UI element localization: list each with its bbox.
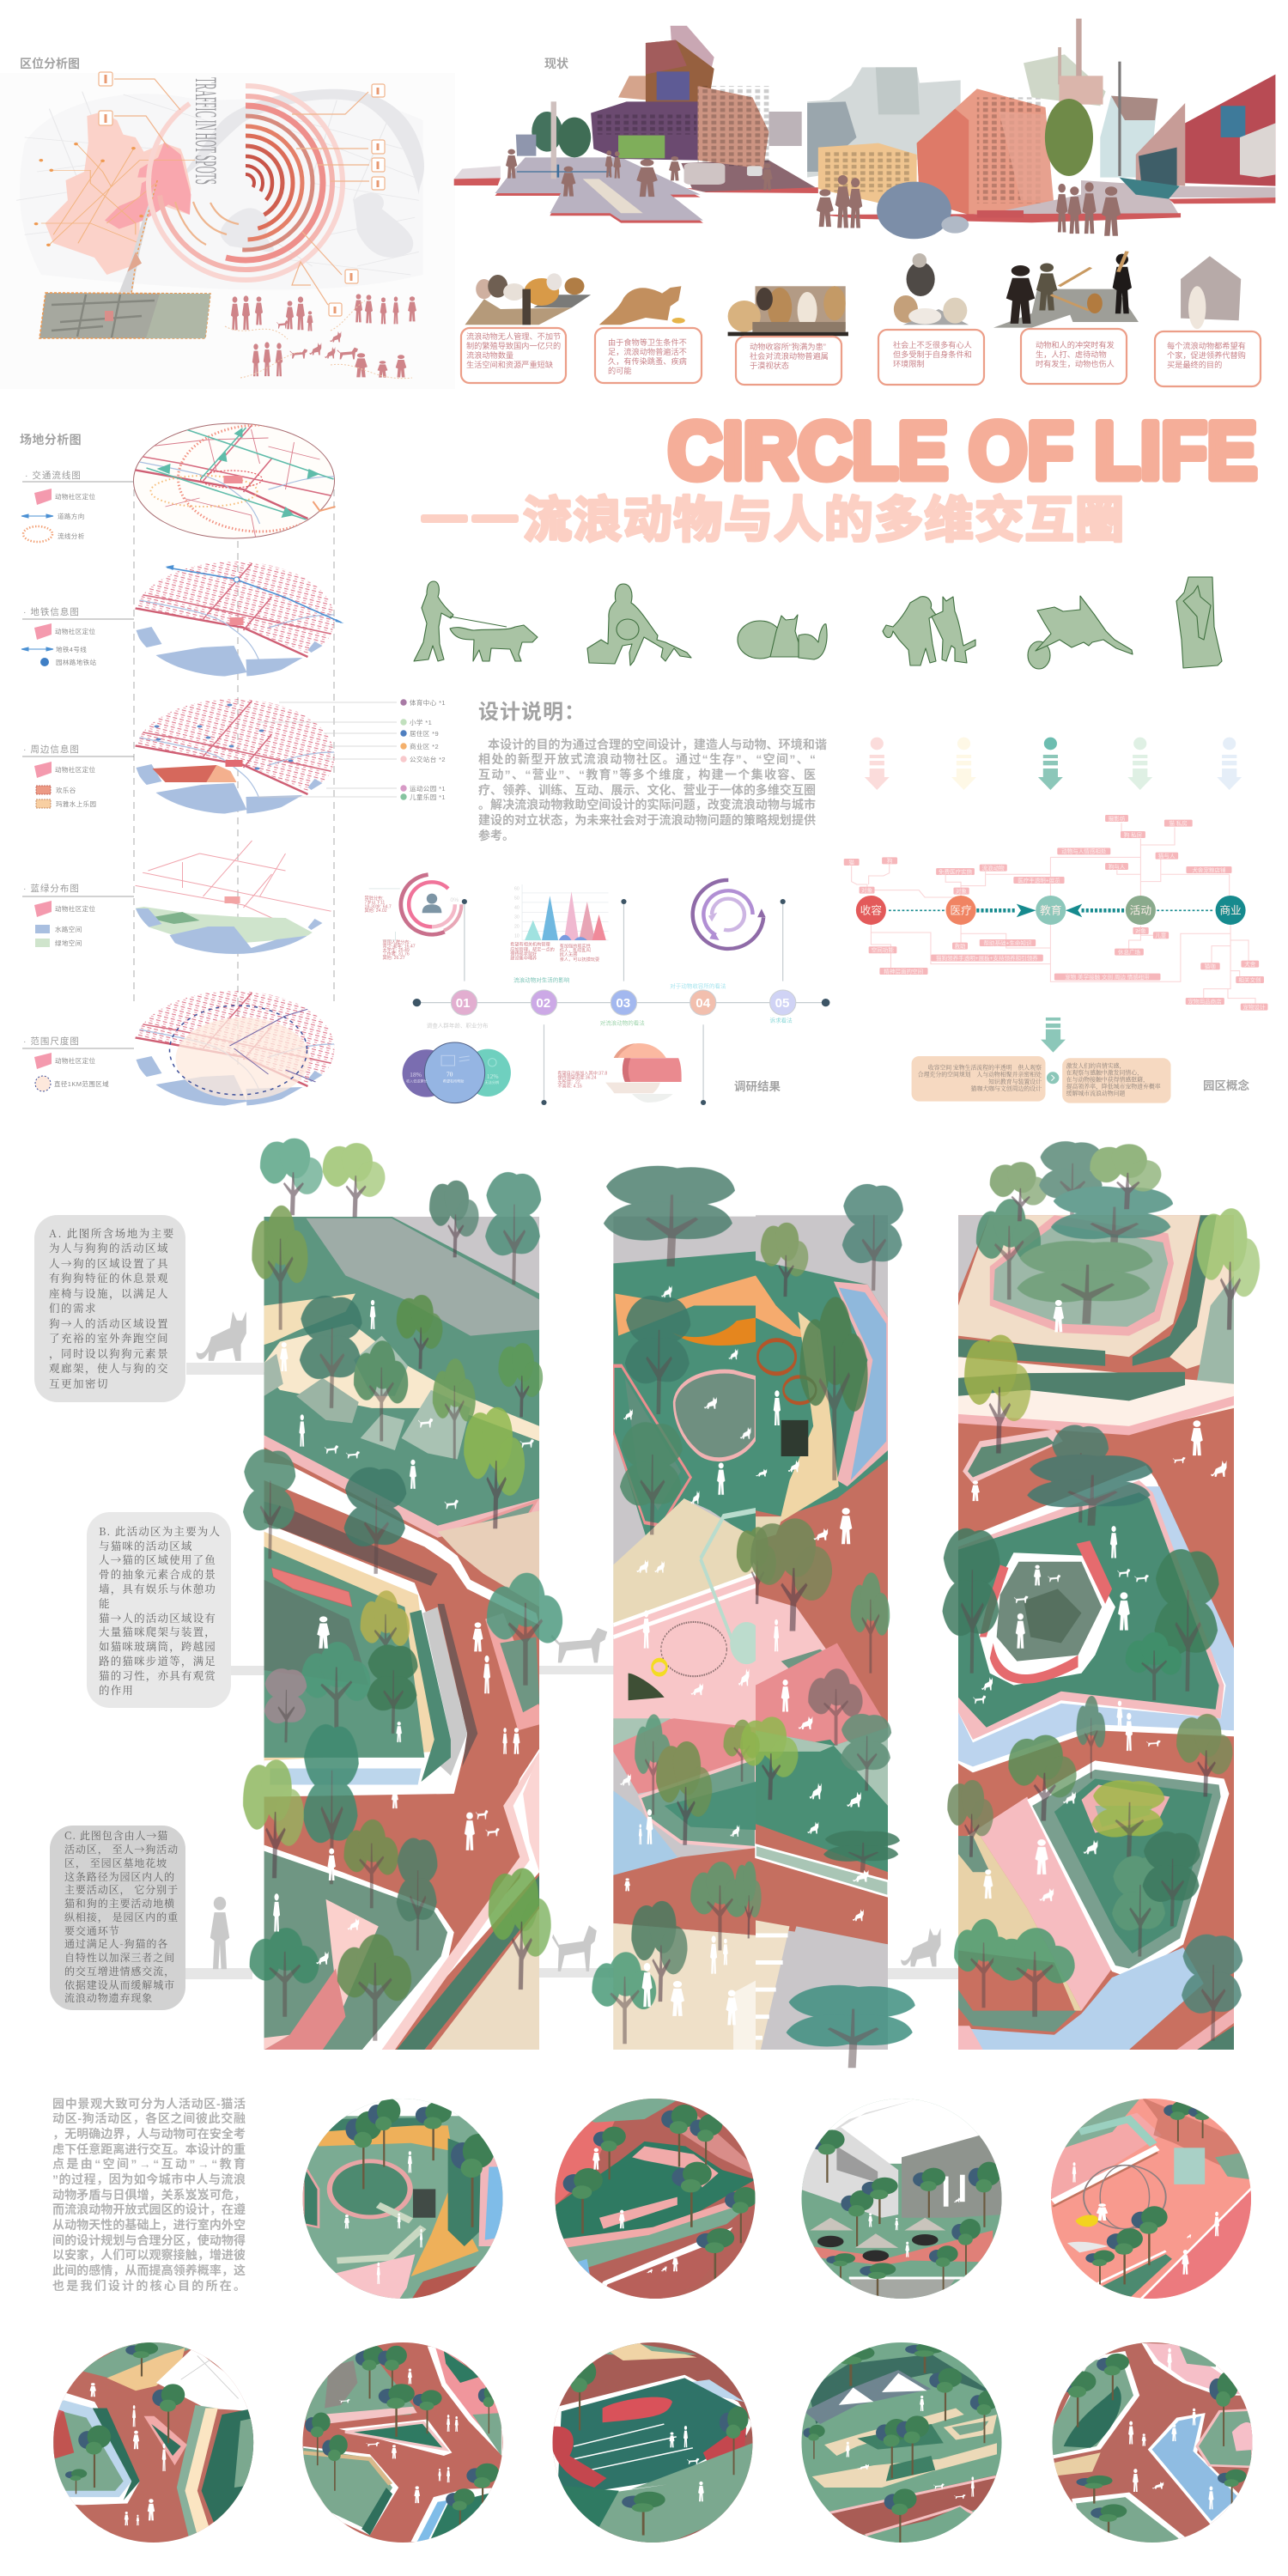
area chart: 60 [514, 886, 519, 891]
legend: metro: · 地铁信息图 [23, 606, 80, 617]
heading: location analysis: 区位分析图 [20, 57, 80, 70]
callout B: 骨的抽象元素合成的景 [99, 1566, 216, 1582]
location map [16, 89, 424, 293]
survey data: age: 其他: 26.27 [383, 955, 405, 961]
captions: 对流浪动物的看法 [600, 1018, 645, 1026]
survey data: impact: 伤人，乱咬乱叫 [560, 948, 591, 954]
description text: 参考。 [478, 829, 514, 842]
concept flow chart: 教育 [1040, 904, 1061, 917]
area chart [514, 884, 609, 940]
note text 5: 时有发生，动物也伤人 [1036, 359, 1115, 368]
ring chart: age and occupation: 0% [450, 897, 459, 903]
survey data: age [365, 896, 416, 961]
callout C: 通过满足人-狗猫的各 [64, 1936, 168, 1951]
callout C: C. 此图包含由人→猫 [64, 1828, 168, 1843]
photo: people and dog conflict [993, 252, 1139, 328]
note text 5: 动物和人的冲突时有发 [1036, 340, 1115, 349]
half-circle chart: 无所谓：22 [557, 1078, 580, 1084]
description text [478, 738, 827, 842]
detail circle 1 [288, 2087, 518, 2310]
photo: shelter dogs [728, 286, 848, 336]
people and pets silhouettes [225, 294, 416, 379]
note text 2: 足，流浪动物普遍活不 [608, 347, 687, 356]
note boxes [461, 328, 1261, 386]
detail circle 8 [799, 2335, 1005, 2548]
trees panel 1 [243, 1139, 562, 2041]
callout C: 区， 至园区墓地花坡 [64, 1856, 167, 1870]
survey data: age: 常驻分布: [365, 896, 384, 902]
note text 3 [750, 342, 829, 370]
text: garden description: 而流浪动物开放式园区的设计，在遵 [52, 2202, 246, 2216]
concept box right [1062, 1058, 1171, 1103]
callout B: 墙，具有娱乐与休憩功 [99, 1581, 216, 1596]
callout A: A. 此图所含场地为主要 [49, 1225, 175, 1241]
timeline: 04 [696, 997, 711, 1011]
callout C: 猫和狗的主要活动地横 [64, 1896, 175, 1911]
panel: location analysis: TRAFFIC IN HOT SPOTS [189, 77, 223, 185]
legend: traffic flow: 动物社区定位 [55, 492, 95, 501]
concept box left: 猫咖犬咖与文创周边的设计 [971, 1084, 1042, 1092]
detail circle 3 [802, 2099, 1001, 2299]
animal photo row [465, 252, 1241, 336]
points of interest legend [258, 698, 446, 801]
concept flow chart: 商业 [1219, 905, 1242, 917]
callout B: 与猫咪的活动区域 [99, 1538, 193, 1553]
note text 3: 动物收容所“狗满为患” [750, 342, 826, 351]
callout C: 要交通环节 [64, 1923, 120, 1938]
heading: design description: 设计说明： [478, 701, 586, 724]
points of interest legend: 公交站台 *2 [410, 755, 446, 763]
captions: 诉求看法 [770, 1017, 793, 1024]
concept flow chart: 狗 [887, 857, 892, 865]
legend: traffic flow: 流线分析 [58, 532, 85, 540]
concept flow chart: 相关文创 [1238, 975, 1261, 983]
concept flow chart: 宠物用品商店 [1188, 997, 1222, 1005]
callout A: 为人与狗狗的活动区域 [49, 1240, 169, 1255]
transport icons [99, 72, 385, 316]
cycle icon [690, 878, 767, 951]
callout C: 主要活动区， 它分别于 [64, 1882, 179, 1897]
text: garden description: 此间的感情，从而提高领养概率，这 [52, 2263, 246, 2277]
text: garden description: 以安家，人们可以观察接触，增进彼 [52, 2248, 246, 2262]
concept box right: 在观察与感触中激发同情心， [1066, 1068, 1143, 1077]
text: garden description: 也是我们设计的核心目的所在。 [52, 2279, 246, 2293]
heading: status: 现状 [544, 57, 568, 70]
figures panel 1 [273, 1300, 534, 1965]
concept flow chart: 救助 [955, 942, 966, 950]
map: metro [134, 562, 343, 679]
callout B: 的作用 [99, 1682, 134, 1698]
panel: park concept [844, 738, 1267, 1103]
callout A: 狗→人的活动区域设置 [49, 1315, 169, 1331]
trees panel 2 [592, 1166, 776, 2044]
axonometric panel 1 [243, 1139, 562, 2050]
points of interest legend: 儿童乐园 *1 [410, 793, 446, 801]
concept flow chart: 猫 [848, 858, 855, 866]
note text 4: 但多受制于自身条件和 [893, 349, 972, 359]
area chart: 50 [514, 896, 519, 901]
legend: blue and green: 动物社区定位 [55, 904, 95, 913]
legend: scale range: · 范围尺度图 [23, 1036, 80, 1047]
note text 4: 社会上不乏很多有心人 [893, 340, 972, 349]
callout C: 的交互增进情感交流， [64, 1964, 175, 1978]
callout A: 座椅与设施，以满足人 [49, 1285, 169, 1301]
aerial inset [39, 293, 210, 338]
detail circle 9 [1053, 2342, 1252, 2543]
legend: blue and green: 绿地空间 [55, 939, 82, 947]
callout B: 路的猫咪步道等，满足 [99, 1653, 216, 1668]
note text 1 [466, 331, 561, 369]
captions [427, 975, 793, 1030]
callout C [50, 1826, 185, 2010]
legend: metro: 园林路地铁站 [56, 658, 96, 666]
half-circle chart: 不喜欢: 4.16 [557, 1084, 582, 1090]
text: garden description: ”的过程，因为如今城市中人与流浪 [52, 2172, 246, 2186]
concept flow chart: 摄影坊 [1109, 814, 1126, 822]
ring chart: traffic in hot spots [149, 86, 343, 280]
venn chart: 希望有所帮助 [443, 1078, 464, 1083]
concept flow chart: 犬舍宠粮店铺 [1192, 866, 1226, 873]
concept flow chart: 狗与人 [1109, 862, 1126, 870]
note text 1: 流浪动物数量 [466, 350, 513, 360]
detail circle 6 [302, 2342, 503, 2543]
survey data: impact: 应加管理，帮定一点的 [510, 946, 555, 952]
callout C: 纵相接， 是园区内的重 [64, 1910, 179, 1924]
legend: surroundings: 欢乐谷 [56, 786, 76, 794]
callout B: 如猫咪玻璃筒，跨越园 [99, 1638, 216, 1654]
concept box left: 知识教育与装置设计 [988, 1078, 1042, 1085]
callout A: 们的需求 [49, 1300, 97, 1315]
concept box left: 合理充分的空间规划 人与动物相聚并亲密相处 [918, 1071, 1042, 1078]
survey data: age: 工作者: 31.76 [383, 951, 410, 957]
callout B: 猫的习性，亦具有观赏 [99, 1668, 216, 1683]
street collage [454, 19, 1275, 239]
callout B: 大量猫咪爬架与装置， [99, 1624, 216, 1639]
venn chart: 无法分辨 [485, 1079, 499, 1084]
captions: 对于动物收容所的看法 [670, 981, 726, 989]
callout C: 活动区， 至人→狗活动 [64, 1842, 179, 1856]
map: surroundings [134, 699, 335, 817]
concept flow chart: 活动 [1130, 905, 1151, 917]
concept flow chart: 猫咖 [1205, 963, 1216, 970]
text: garden description: 点是由“空间”→“互动”→“教育 [52, 2157, 246, 2171]
silhouette: dog and cat playing [883, 597, 975, 665]
callout A: ，同时设以狗狗元素景 [49, 1346, 169, 1361]
callout A [34, 1215, 185, 1402]
note text 6: 买是最终的目的 [1167, 360, 1222, 369]
concept flow chart: 对象 [956, 887, 968, 895]
half-circle chart: 希望自己能加入其中:37.8 [557, 1070, 607, 1076]
venn chart: 收入低或繁忙 [406, 1078, 428, 1084]
gray frosted background [807, 67, 961, 178]
legend: scale range [22, 1036, 134, 1091]
map: scale range [134, 991, 335, 1109]
figures panel 3 [971, 1300, 1226, 1901]
legend: surroundings: 玛雅水上乐园 [56, 799, 96, 808]
legend: traffic flow: 道路方向 [58, 512, 85, 520]
silhouette: cat climbing tree [1176, 577, 1222, 668]
callout A: 互更加密切 [49, 1376, 109, 1391]
legend: metro: 动物社区定位 [55, 627, 95, 635]
detail circle 4 [1047, 2087, 1261, 2310]
survey data: age: 青少·老年: 16.47 [383, 943, 416, 949]
heading: park concept: 园区概念 [1203, 1078, 1249, 1092]
callout A: 有狗狗特征的休息景观 [49, 1270, 169, 1285]
survey data: age: 18-30岁: 64.7 [365, 903, 392, 909]
note text 3: 社会对流浪动物普遍属 [750, 351, 829, 361]
legend: blue and green: 水路空间 [55, 925, 82, 933]
concept flow chart: 宠物设计 [1243, 1003, 1266, 1011]
callout A: 观廊架，使人与狗的交 [49, 1360, 169, 1376]
photo: stray cat [599, 286, 685, 325]
note text 6 [1167, 341, 1246, 369]
concept box right: 在与动物接触中获得情感慰藉， [1066, 1075, 1149, 1084]
note text 4 [893, 340, 972, 368]
note text 2: 的可能 [608, 366, 632, 375]
legend: metro [21, 606, 134, 666]
callout A: 了充裕的室外奔跑空间 [49, 1330, 169, 1346]
note text 6: 个家，促进领养代替购 [1167, 350, 1246, 360]
note text 3: 于漠视状态 [750, 361, 789, 370]
survey data: age: 大学生: 25.49 [383, 947, 410, 953]
tags [844, 815, 1267, 1011]
detail circle 7 [549, 2332, 756, 2555]
callout B: B. 此活动区为主要为人 [99, 1523, 221, 1539]
note text 2: 久，有传染跳蚤、疾病 [608, 356, 687, 366]
note text 5: 生，人打、虐待动物 [1036, 349, 1107, 359]
area chart: 40 [514, 905, 519, 910]
concept flow chart: 精神层面的空间 [884, 967, 923, 975]
callout C: 这条路径为园区内人的 [64, 1869, 175, 1884]
timeline [413, 899, 829, 1105]
concept box right: 提高领养率，降低城市宠物遗弃概率 [1066, 1082, 1161, 1091]
text: garden description: 间的设计规划与合理分区，使动物得 [52, 2233, 246, 2247]
survey data: impact: 建设集中哺养 [510, 956, 537, 962]
detail circle 2 [554, 2087, 760, 2310]
panel: site analysis [20, 423, 446, 1109]
concept box left: 收容空间 宠物生活流程的半透明 供人观察 [928, 1064, 1042, 1072]
half-circle chart: 保持观望态度:36.24 [557, 1074, 597, 1080]
concept flow chart: 对象 [861, 886, 873, 894]
survey data: impact: 扰人无感 [560, 952, 577, 958]
note text 6: 每个流浪动物都希望有 [1167, 341, 1246, 350]
note text 2 [608, 337, 687, 375]
legend: surroundings: · 周边信息图 [23, 744, 80, 755]
note text 1: 制的繁殖导致国内一亿只的 [466, 341, 561, 350]
captions: 流浪动物对生活的影响 [513, 975, 569, 983]
heading: site analysis: 场地分析图 [20, 433, 82, 447]
concept flow chart: 猫 私房 [1169, 819, 1188, 827]
concept flow chart: 流浪动物 [982, 864, 1005, 872]
concept flow chart: 猫狗领养手透明+展板+支持领养和引领养 [936, 954, 1038, 962]
title: CIRCLE OF LIFE [668, 405, 1257, 495]
concept flow chart: 空间功能 [872, 946, 894, 954]
silhouette: person hugging dog [587, 584, 691, 665]
concept flow chart [844, 814, 1267, 1011]
text: garden description: 园中景观大致可分为人活动区-猫活 [52, 2097, 246, 2111]
survey data: impact [510, 942, 599, 963]
points of interest legend: 小学 *1 [410, 718, 432, 726]
timeline: 05 [775, 997, 789, 1011]
timeline: 01 [456, 997, 471, 1011]
callout C: 自特性以加深三者之间 [64, 1950, 175, 1965]
captions: 调查人群年龄、职业分布 [427, 1022, 489, 1030]
legend: blue and green [22, 883, 134, 947]
legend: scale range: 动物社区定位 [55, 1056, 95, 1065]
survey data: impact: 有加强的现实性 [560, 943, 591, 949]
callout B: 能 [99, 1595, 111, 1611]
concept flow chart: 帮助基础+生命知识 [983, 939, 1032, 946]
text: garden description: 从动物天性的基础上，进行室内外空 [52, 2218, 246, 2232]
concept flow chart: 犬舍 [1244, 960, 1256, 968]
silhouette: dog with frisbee [1028, 596, 1133, 669]
concept flow chart: 宠物 美学接触 文创 周边 情感纽带 [1065, 973, 1150, 981]
concept flow chart: 休息广场 [1118, 948, 1141, 956]
legend: metro: 地铁4号线 [56, 645, 87, 653]
connectors and gray silhouettes [185, 1311, 960, 1979]
note text 2: 由于食物等卫生条件不 [608, 337, 687, 347]
green silhouettes [414, 577, 1222, 669]
survey data: age: 周围人群分布: [383, 939, 410, 945]
note text 1: 流浪动物无人管理、不加节 [466, 331, 561, 341]
concept flow chart: 狗 私房 [1124, 830, 1142, 838]
description text: 相处的新型开放式流浪动物社区。通过“生存”、“空间”、“ [478, 752, 816, 766]
ring chart: age and occupation [369, 865, 473, 945]
callout C: 依据建设从而缓解城市 [64, 1978, 175, 1992]
text: garden description [52, 2097, 246, 2293]
description text: 本设计的目的为通过合理的空间设计，建造人与动物、环境和谐 [488, 738, 827, 751]
callout C: 流浪动物遗弃现象 [64, 1990, 153, 2005]
text: garden description: 虑下任意距离进行交互。本设计的重 [52, 2142, 246, 2156]
concept flow chart: 医疗 [950, 905, 972, 917]
half-circle chart [557, 1043, 682, 1103]
venn chart [403, 1042, 511, 1103]
area chart: 20 [514, 924, 519, 929]
brown human silhouettes [506, 149, 1121, 236]
venn chart: 70 [447, 1070, 453, 1078]
venn chart: 18% [410, 1071, 422, 1078]
area chart: 10 [514, 933, 519, 939]
area chart: 30 [514, 914, 519, 920]
survey data: age: 7岁以下11 [365, 900, 385, 906]
note text 1: 生活空间和资源严重短缺 [466, 360, 553, 369]
silhouette: cat and dog cuddling [738, 615, 827, 659]
subtitle: 流浪动物与人的多维交互圈 [523, 481, 1124, 551]
axonometric panel 2 [592, 1166, 915, 2068]
concept flow chart: 动物与人情感相处 [1061, 848, 1107, 855]
trees panel 3 [942, 1141, 1260, 2041]
callout B [87, 1512, 231, 1708]
text: garden description: ，无明确边界，人与动物可在安全考 [52, 2127, 246, 2141]
survey data: impact: 亲人，可以抚摸玩耍 [560, 957, 599, 963]
detail circle 5 [53, 2342, 254, 2543]
concept box left [912, 1056, 1046, 1102]
survey data: impact: 希望有相关机构管理 [510, 942, 550, 948]
five down arrows [865, 738, 1242, 790]
concept box right: 激发人们的真情实感， [1066, 1061, 1125, 1070]
points of interest legend: 商业区 *2 [410, 742, 439, 750]
concept flow chart: 医疗手透明+展览 [1018, 876, 1060, 884]
arrow to concept boxes [1041, 1018, 1066, 1053]
concept box right: 缓解城市流浪动物问题 [1066, 1089, 1126, 1097]
legend: traffic flow: · 交通流线图 [25, 470, 82, 481]
panel: survey results [365, 865, 829, 1105]
axonometric panel 3 [942, 1141, 1260, 2050]
legend: scale range: 直径1KM范围区域 [54, 1079, 109, 1088]
panel: design description [478, 701, 827, 842]
points of interest legend: 运动公园 *1 [410, 784, 446, 793]
legend: surroundings [22, 744, 134, 808]
callout B: 猫→人的活动区域设有 [99, 1610, 216, 1625]
text: garden description: 动物矛盾与日俱增，关系岌岌可危， [52, 2188, 246, 2202]
concept flow chart: 收容 [860, 904, 882, 917]
legend: surroundings: 动物社区定位 [55, 765, 95, 774]
photo: cats eating [465, 273, 591, 325]
description text: 互动”、“营业”、“教育”等多个维度，构建一个集收容、医 [478, 768, 816, 781]
legend: traffic flow [21, 470, 134, 542]
text: garden description: 动区-狗活动区，各区之间彼此交融 [52, 2111, 246, 2125]
note text 4: 环境限制 [893, 359, 925, 368]
venn chart: 12% [487, 1072, 499, 1080]
description text: 疗、领养、训练、互动、展示、文化、营业于一体的多维交互圈 [478, 783, 816, 797]
map: blue and green [134, 841, 335, 954]
panel: current status [454, 19, 1275, 386]
concept flow chart: 免费医疗实施 [939, 867, 973, 875]
concept flow chart: 对象 [1135, 927, 1147, 934]
callout A: 人→狗的区域设置了具 [49, 1255, 169, 1271]
description text: 建设的对立状态，为未来社会对于流浪动物问题的策略规划提供 [478, 813, 816, 827]
figures panel 2 [620, 1285, 868, 2025]
survey data: age: 其他: 24.02 [365, 908, 387, 914]
silhouette: person walking dog [414, 581, 538, 661]
photo: dog house [1181, 256, 1241, 329]
note text 5 [1036, 340, 1115, 368]
photo: woman with dogs [894, 253, 969, 325]
callout B: 人→猫的区域使用了鱼 [99, 1552, 216, 1567]
survey data: impact: 保持现状就好 [510, 951, 537, 957]
concept flow chart: 儿童 [1155, 932, 1167, 939]
panel: location analysis [0, 57, 455, 389]
concept flow chart: 猫与人 [1158, 852, 1176, 860]
timeline: 03 [616, 997, 630, 1011]
legend: blue and green: · 蓝绿分布图 [23, 883, 80, 894]
points of interest legend: 体育中心 *1 [410, 698, 446, 707]
description text: 。解决流浪动物救助空间设计的实际问题，改变流浪动物与城市 [478, 798, 816, 811]
heading: survey results: 调研结果 [734, 1079, 781, 1093]
link icon [1047, 1072, 1059, 1084]
map: traffic flow [134, 423, 342, 538]
points of interest legend: 居住区 *9 [410, 729, 439, 738]
timeline: 02 [536, 997, 550, 1011]
